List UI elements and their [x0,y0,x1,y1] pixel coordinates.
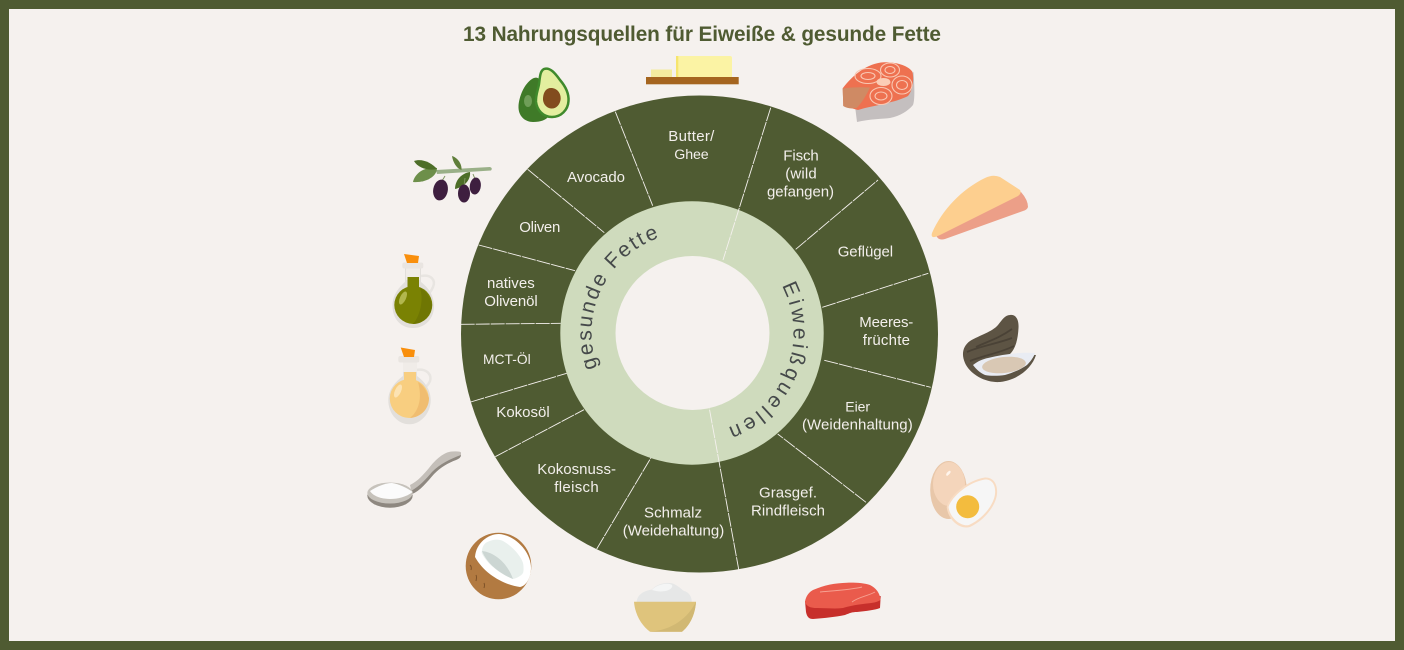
icon: oyster [963,315,1036,382]
segment: Fisch: gefangen) [767,184,834,200]
segment: Eier: (Weidenhaltung) [802,416,913,434]
segment: Kokosnussfleisch: fleisch [554,479,599,496]
segment: Geflügel: Geflügel [838,244,893,260]
segment: Fisch: Fisch [783,148,819,164]
icon: avocado [518,69,569,122]
segment: Kokosnussfleisch [537,461,616,496]
segment: Butter/Ghee: Butter/ [668,128,715,145]
icon: spoon with powder [367,451,461,508]
segment: natives Olivenöl [484,275,538,310]
segment: Meeresfrüchte: früchte [863,332,910,349]
icon: beef [805,583,881,619]
icon: olive branch [413,156,492,202]
segment: MCT-Öl: MCT-Öl [483,350,531,367]
title: 13 Nahrungsquellen für Eiweiße & gesunde Fette [463,23,941,46]
icon: poultry [932,176,1028,240]
segment: Grasgefüttertes Rindfleisch: Grasgef. [759,484,817,502]
segment: Avocado: Avocado [567,169,625,186]
ring label: Eiweißquellen: Eiweißquellen [729,281,808,437]
food wheel [461,96,938,572]
segment: Butter/Ghee [668,128,715,163]
icon: butter [646,56,739,84]
icon: salmon steak [843,62,914,122]
icon: coconut oil bottle [388,348,431,424]
segment: Schmalz: (Weidehaltung) [623,522,724,540]
segment: Schmalz [623,504,724,540]
segment: Kokosöl: Kokosöl [496,404,550,421]
segment: Grasgefüttertes Rindfleisch: Rindfleisch [751,502,825,520]
segment: Butter/Ghee: Ghee [674,147,709,163]
segment: Fisch: (wild [785,166,817,182]
segment: Fisch [767,148,834,200]
segment: Meeresfrüchte [859,314,913,349]
segment: Grasgefüttertes Rindfleisch [751,484,825,520]
segment: Oliven: Oliven [519,219,560,236]
icon: olive oil bottle [392,254,434,328]
segment: Meeresfrüchte: Meeres- [859,314,913,331]
segment: natives Olivenöl: natives [487,275,535,292]
segment: natives Olivenöl: Olivenöl [484,293,538,310]
ring label: gesunde Fette: gesunde Fette [580,228,657,369]
segment: Kokosnussfleisch: Kokosnuss- [537,461,616,478]
icon: eggs [930,461,997,528]
segment: Eier: Eier [845,398,870,414]
icon: coconut [466,533,531,599]
icon: bowl of lard [634,583,696,632]
segment: Schmalz: Schmalz [644,504,702,522]
segment: Eier [802,398,913,434]
